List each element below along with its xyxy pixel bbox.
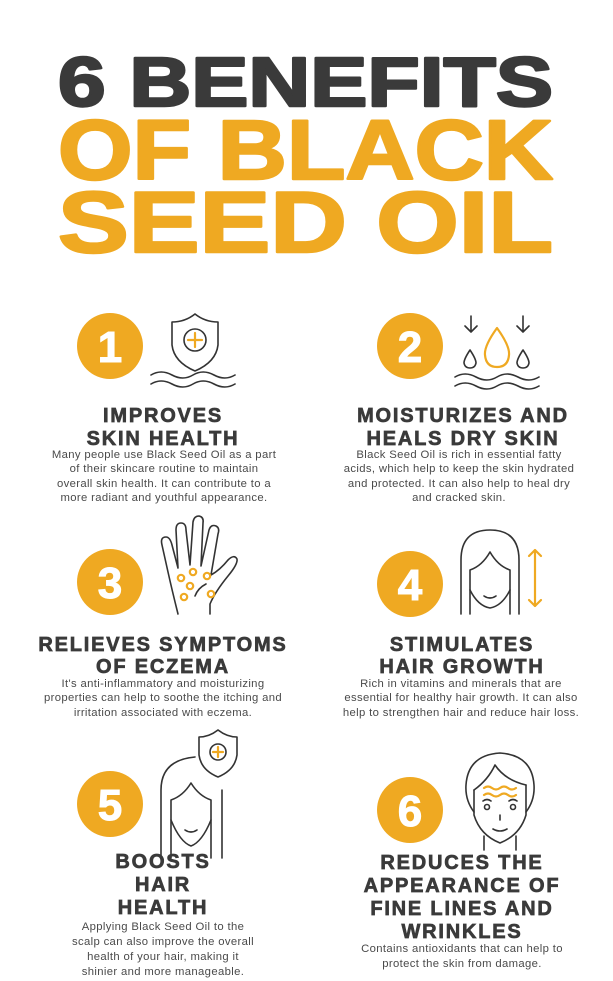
text 2: Black Seed Oil is rich in essential fatty	[356, 449, 562, 461]
panel: benefit 1	[52, 313, 277, 504]
text 1: of their skincare routine to maintain	[70, 463, 258, 475]
text 4	[343, 678, 579, 719]
heading 2	[357, 405, 569, 450]
heading 3: OF ECZEMA	[96, 656, 230, 678]
number circle 2	[377, 313, 443, 379]
panel: benefit 5	[72, 730, 254, 978]
title: SEED OIL	[58, 175, 553, 271]
text 2: and protected. It can also help to heal dry	[348, 478, 570, 490]
text 3	[44, 678, 282, 719]
heading 5	[115, 851, 211, 919]
text 1: overall skin health. It can contribute to a	[57, 478, 271, 490]
text 3: It's anti-inflammatory and moisturizing	[62, 678, 264, 690]
panel: benefit 6	[361, 753, 563, 970]
number circle 6	[377, 777, 443, 843]
text 6	[361, 943, 563, 970]
heading 2: HEALS DRY SKIN	[366, 428, 560, 450]
heading 6: WRINKLES	[401, 921, 523, 943]
heading 1: IMPROVES	[103, 405, 223, 427]
text 3: properties can help to soothe the itching and	[44, 692, 282, 704]
heading 1	[87, 405, 239, 450]
title	[58, 43, 553, 271]
text 4: essential for healthy hair growth. It can also	[344, 692, 578, 704]
text 3: irritation associated with eczema.	[74, 707, 252, 719]
text 2: acids, which help to keep the skin hydrated	[344, 463, 574, 475]
panel: benefit 2	[344, 313, 574, 504]
title: 6 BENEFITS	[58, 43, 553, 121]
number circle 2: 2	[398, 323, 422, 372]
text 2	[344, 449, 574, 504]
number circle 4: 4	[398, 561, 423, 610]
heading 5: HAIR	[135, 874, 191, 896]
number circle 4	[377, 551, 443, 617]
icon: long hair head with arrow	[461, 530, 541, 614]
text 6: protect the skin from damage.	[382, 958, 542, 970]
title: OF BLACK	[58, 103, 553, 197]
heading 4: STIMULATES	[390, 634, 534, 656]
panel: benefit 4	[343, 530, 579, 719]
text 4: help to strengthen hair and reduce hair loss.	[343, 707, 579, 719]
text 2: and cracked skin.	[412, 492, 506, 504]
text 5: Applying Black Seed Oil to the	[82, 921, 244, 933]
text 5	[72, 921, 254, 978]
icon: hair with shield	[161, 730, 237, 858]
heading 6: REDUCES THE	[380, 852, 544, 874]
heading 5: HEALTH	[118, 897, 208, 919]
text 5: shinier and more manageable.	[82, 966, 244, 978]
heading 3	[38, 634, 288, 678]
text 4: Rich in vitamins and minerals that are	[360, 678, 562, 690]
text 5: scalp can also improve the overall	[72, 936, 254, 948]
heading 1: SKIN HEALTH	[87, 428, 239, 450]
number circle 3: 3	[98, 559, 122, 608]
heading 6: FINE LINES AND	[370, 898, 554, 920]
panel: benefit 3	[38, 516, 288, 719]
number circle 1	[77, 313, 143, 379]
heading 4: HAIR GROWTH	[379, 656, 545, 678]
heading 6	[364, 852, 560, 943]
icon: shield with waves	[151, 314, 235, 387]
number circle 1: 1	[98, 323, 122, 372]
heading 4	[379, 634, 545, 678]
heading 6: APPEARANCE OF	[364, 875, 560, 897]
text 1: more radiant and youthful appearance.	[60, 492, 268, 504]
text 6: Contains antioxidants that can help to	[361, 943, 563, 955]
text 5: health of your hair, making it	[87, 951, 239, 963]
number circle 6: 6	[398, 787, 422, 836]
number circle 5: 5	[98, 781, 122, 830]
text 1	[52, 449, 277, 504]
icon: face with forehead lines	[466, 753, 534, 850]
number circle 5	[77, 771, 143, 837]
number circle 3	[77, 549, 143, 615]
icon: drops with waves	[455, 316, 539, 389]
icon: hand with spots	[162, 516, 237, 614]
heading 5: BOOSTS	[115, 851, 211, 873]
heading 3: RELIEVES SYMPTOMS	[38, 634, 288, 656]
text 1: Many people use Black Seed Oil as a part	[52, 449, 277, 461]
heading 2: MOISTURIZES AND	[357, 405, 569, 427]
